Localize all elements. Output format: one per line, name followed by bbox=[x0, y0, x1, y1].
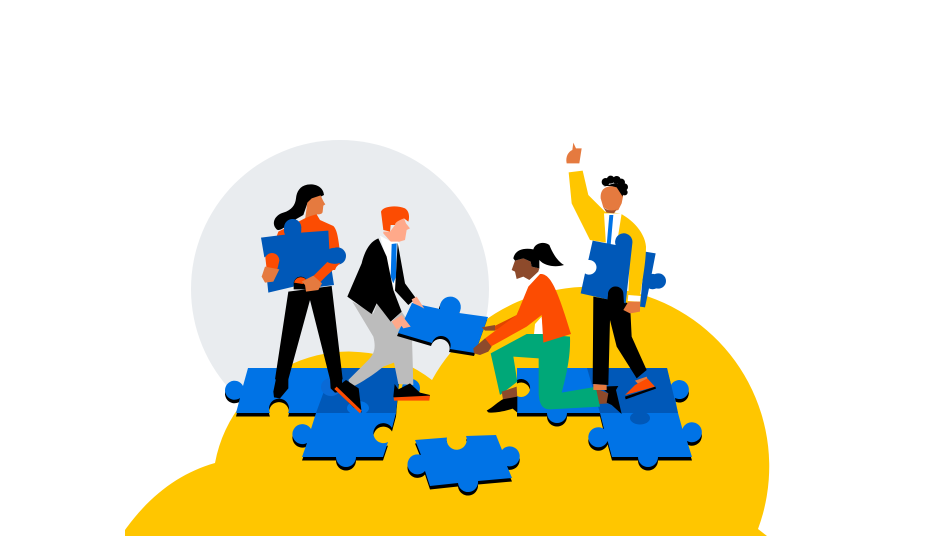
puzzle piece: top left bbox=[225, 368, 420, 416]
yellow hill bbox=[125, 287, 769, 536]
puzzle piece: carried between two people bbox=[397, 297, 488, 356]
puzzle piece: lower left bbox=[292, 413, 396, 470]
puzzle piece: lower right bbox=[588, 412, 702, 470]
person: kneeling woman bbox=[473, 243, 622, 414]
puzzle piece: top right bbox=[517, 368, 689, 426]
hands of man on carried piece bbox=[392, 297, 424, 329]
person: woman holding puzzle piece bbox=[261, 184, 346, 398]
grey background circle bbox=[191, 140, 489, 438]
person: man in yellow jacket with raised hand bbox=[566, 143, 666, 399]
person: man in black jacket bbox=[334, 206, 430, 413]
puzzle piece: loose centre bbox=[408, 435, 520, 496]
